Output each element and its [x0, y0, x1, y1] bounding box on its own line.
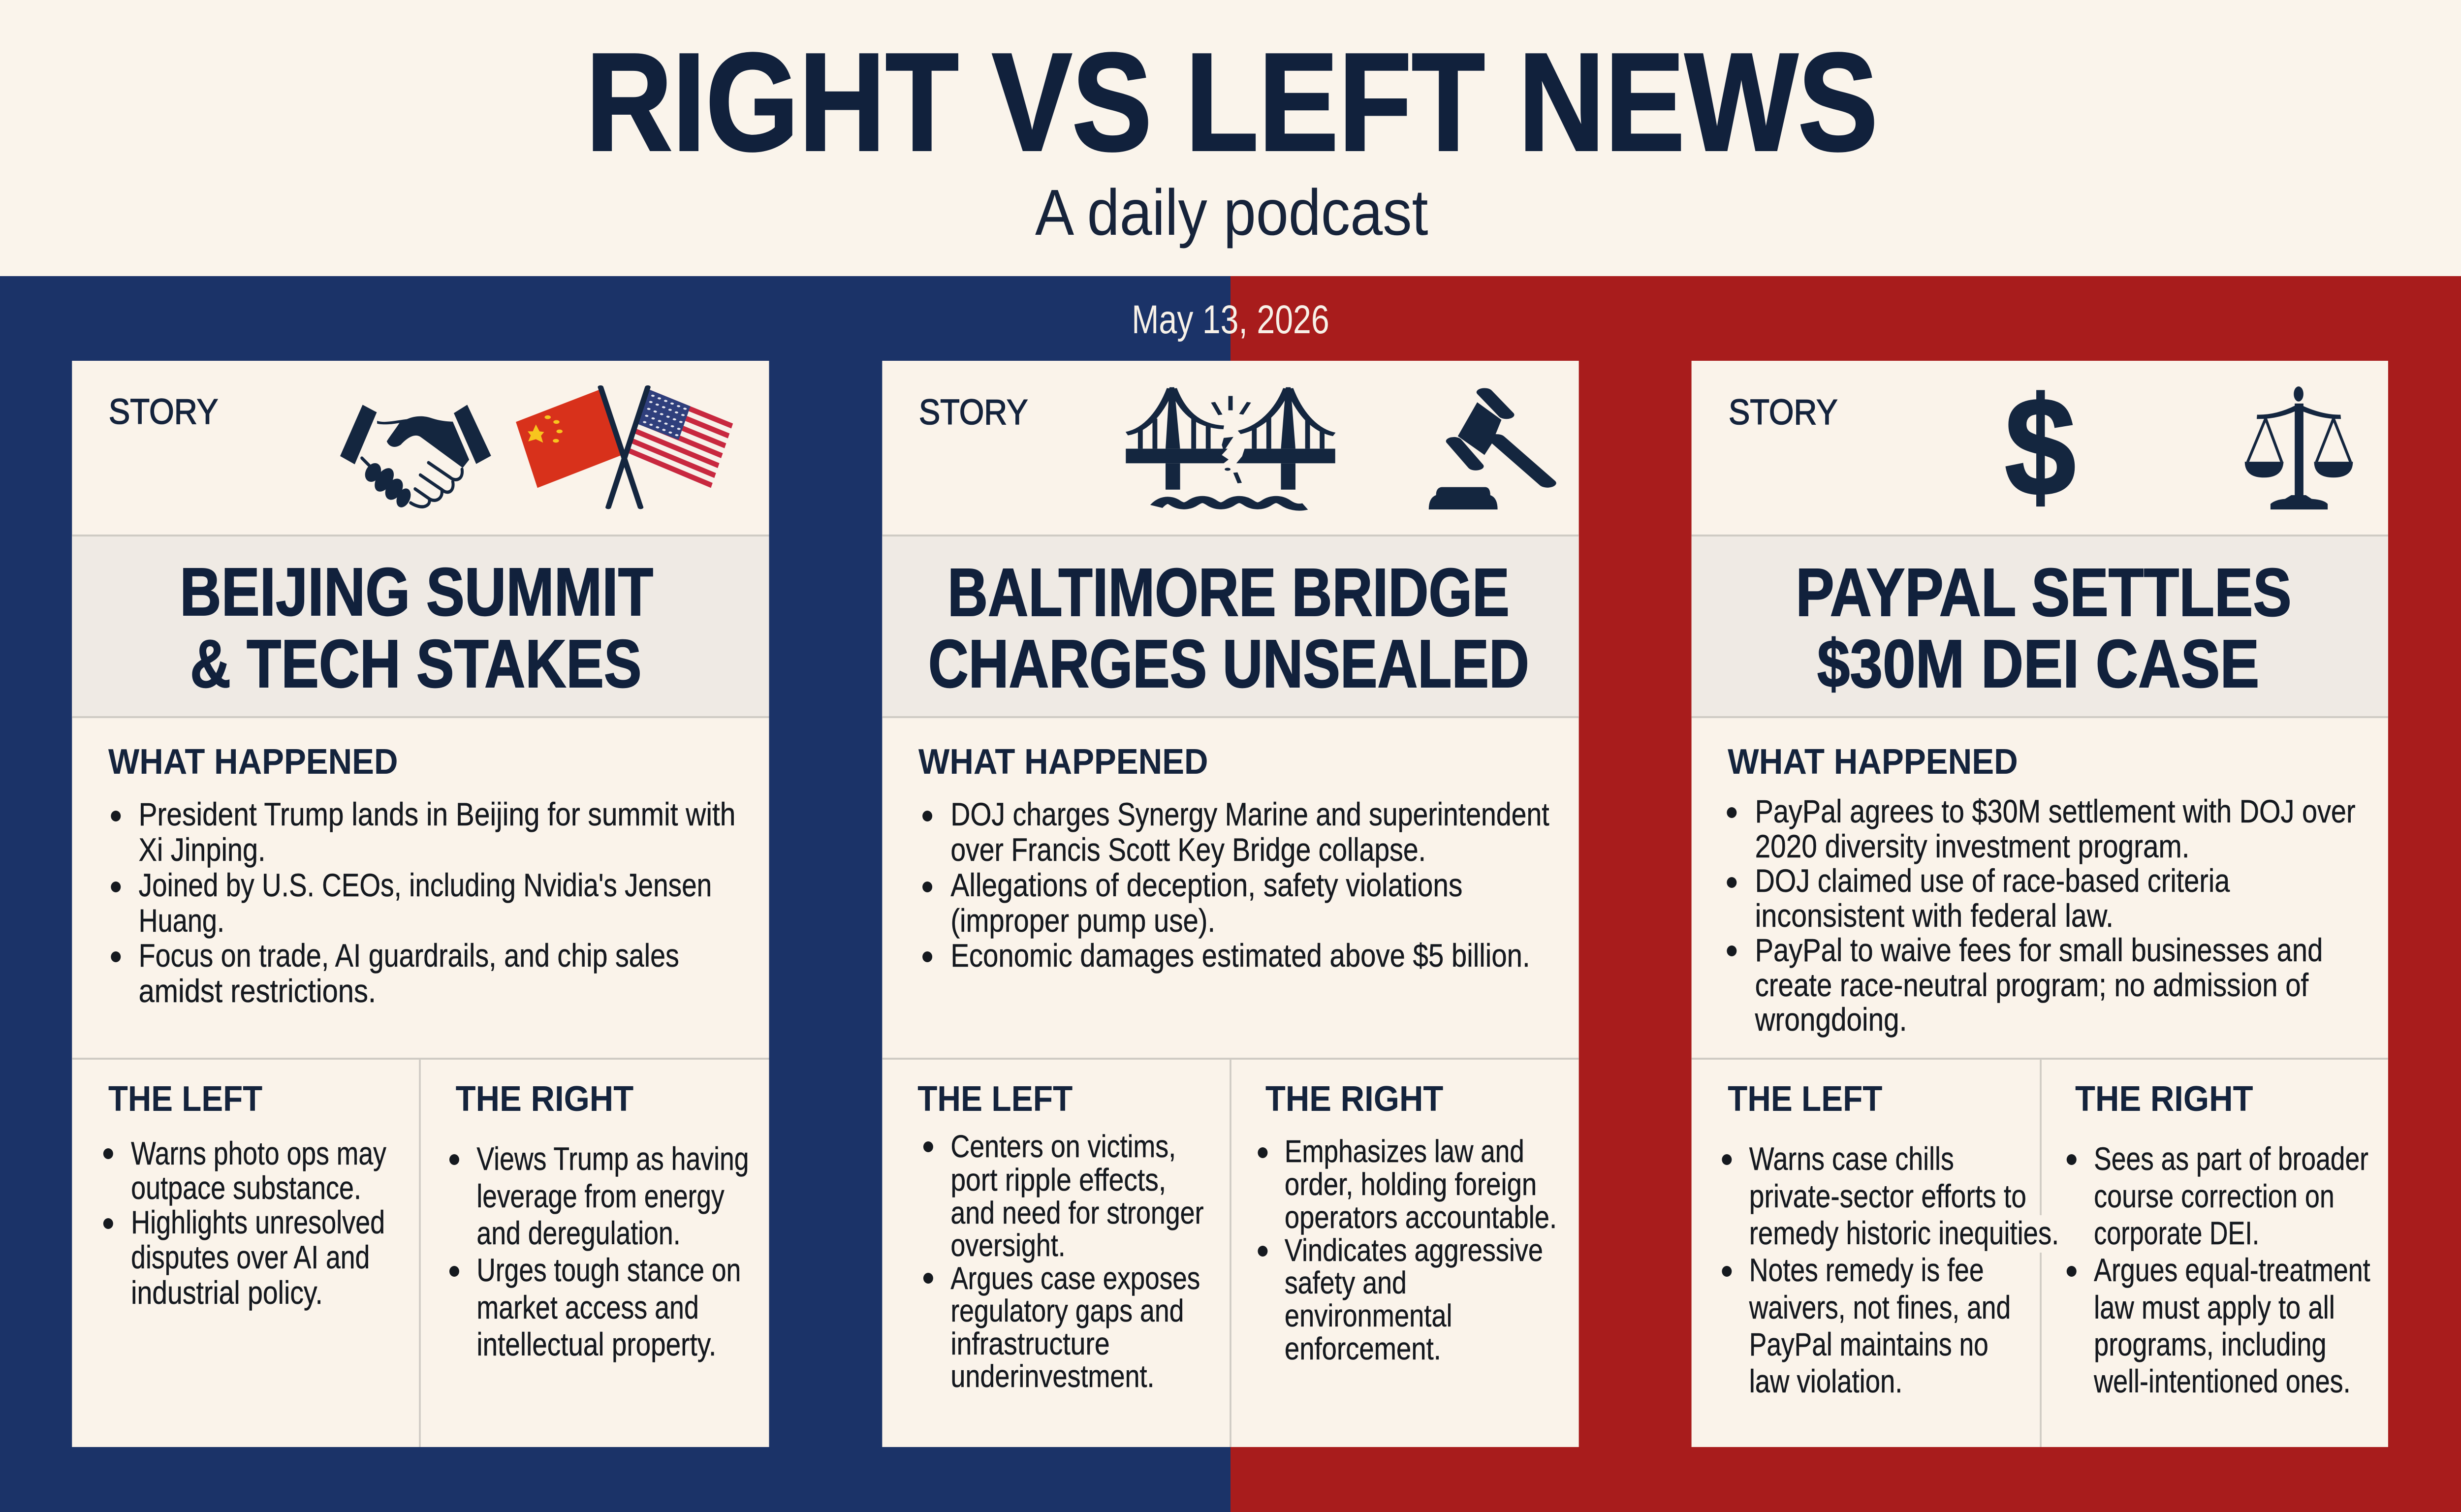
what happened bullets: Huang. — [139, 903, 224, 939]
the right bullets: corporate DEI. — [2094, 1215, 2259, 1252]
the right bullets: Urges tough stance on — [476, 1252, 741, 1289]
what happened bullets: wrongdoing. — [1755, 1002, 1907, 1038]
heading: the left: THE LEFT — [1728, 1079, 1882, 1119]
heading: the left: THE LEFT — [917, 1079, 1073, 1119]
the right bullets: course correction on — [2094, 1178, 2335, 1215]
the left bullets: PayPal maintains no — [1749, 1326, 1988, 1363]
what happened bullets: PayPal agrees to $30M settlement with DOJ over — [1755, 793, 2356, 830]
icon: crossed China and US flags — [516, 387, 733, 507]
the right bullets: and deregulation. — [476, 1215, 681, 1252]
headline: PAYPAL SETTLES — [1796, 554, 2292, 630]
story label: STORY — [109, 392, 218, 432]
the left bullets: infrastructure — [950, 1326, 1110, 1361]
icon: dollar sign: $ — [2005, 368, 2076, 525]
the right bullets — [2067, 1141, 2370, 1400]
the right bullets: operators accountable. — [1285, 1199, 1557, 1235]
the left bullets — [1722, 1141, 2059, 1400]
icon: gavel — [1429, 392, 1547, 509]
the right bullets: Argues equal-treatment — [2094, 1252, 2370, 1289]
the left bullets — [923, 1129, 1203, 1394]
what happened bullets — [111, 796, 735, 1009]
the left bullets: Warns case chills — [1749, 1141, 1954, 1177]
heading: what happened: WHAT HAPPENED — [918, 742, 1208, 782]
red background half — [1230, 276, 2461, 1512]
the right bullets: enforcement. — [1285, 1331, 1441, 1366]
heading: the right: THE RIGHT — [1265, 1079, 1443, 1119]
the right bullets: well-intentioned ones. — [2093, 1363, 2351, 1400]
heading: what happened: WHAT HAPPENED — [108, 742, 398, 782]
panel: Baltimore bridge story — [882, 361, 1579, 1447]
the left bullets: private-sector efforts to — [1749, 1178, 2026, 1215]
the left bullets: remedy historic inequities. — [1749, 1215, 2059, 1252]
headline: $30M DEI CASE — [1817, 626, 2259, 701]
the left bullets: regulatory gaps and — [950, 1293, 1184, 1328]
story label: STORY — [1729, 392, 1838, 432]
icon: broken bridge — [1126, 387, 1335, 507]
what happened bullets: Allegations of deception, safety violations — [950, 867, 1462, 904]
what happened bullets: DOJ charges Synergy Marine and superintendent — [950, 796, 1549, 833]
the right bullets: order, holding foreign — [1285, 1166, 1537, 1202]
what happened bullets: create race-neutral program; no admission of — [1755, 967, 2309, 1004]
what happened bullets: Joined by U.S. CEOs, including Nvidia's Jensen — [139, 867, 712, 904]
the right bullets: leverage from energy — [476, 1178, 725, 1215]
story label: STORY — [919, 392, 1028, 432]
the right bullets: Views Trump as having — [476, 1141, 749, 1177]
headline — [180, 554, 653, 701]
what happened bullets — [922, 796, 1549, 974]
what happened bullets: DOJ claimed use of race-based criteria — [1755, 863, 2230, 899]
blue background half — [0, 276, 1230, 1512]
what happened bullets: amidst restrictions. — [139, 973, 376, 1009]
what happened bullets: Focus on trade, AI guardrails, and chip sales — [139, 938, 679, 974]
header background — [0, 0, 2461, 276]
heading: the right: THE RIGHT — [2075, 1079, 2253, 1119]
what happened bullets: PayPal to waive fees for small businesses and — [1755, 932, 2323, 969]
the right bullets: environmental — [1285, 1298, 1452, 1333]
what happened bullets: over Francis Scott Key Bridge collapse. — [950, 832, 1426, 868]
the right bullets: market access and — [476, 1290, 699, 1326]
the left bullets: and need for stronger — [950, 1195, 1203, 1230]
the right bullets — [449, 1141, 749, 1363]
heading: the left: THE LEFT — [108, 1079, 262, 1119]
the right bullets: intellectual property. — [476, 1326, 716, 1363]
what happened bullets: Xi Jinping. — [139, 832, 266, 868]
headline: & TECH STAKES — [190, 626, 642, 701]
the left bullets: Notes remedy is fee — [1749, 1252, 1984, 1289]
headline — [928, 554, 1529, 701]
what happened bullets — [1727, 793, 2356, 1038]
heading: the right: THE RIGHT — [456, 1079, 633, 1119]
icon: scales of justice — [2245, 386, 2353, 509]
icon: handshake — [340, 405, 491, 510]
title: RIGHT VS LEFT NEWS — [586, 25, 1878, 180]
what happened bullets: inconsistent with federal law. — [1755, 898, 2114, 934]
the right bullets: law must apply to all — [2094, 1290, 2335, 1326]
the left bullets: disputes over AI and — [131, 1239, 370, 1276]
panel: PayPal settlement story — [1692, 361, 2388, 1447]
the left bullets: port ripple effects, — [950, 1162, 1166, 1197]
panel: Beijing summit story — [72, 361, 769, 1447]
headline — [1796, 554, 2292, 701]
what happened bullets: (improper pump use). — [950, 903, 1215, 939]
the left bullets: oversight. — [950, 1228, 1066, 1263]
the left bullets: Warns photo ops may — [131, 1135, 386, 1172]
the left bullets: Highlights unresolved — [131, 1204, 385, 1241]
the left bullets: Centers on victims, — [950, 1129, 1176, 1164]
date: May 13, 2026 — [1132, 297, 1329, 342]
the left bullets: Argues case exposes — [950, 1260, 1200, 1296]
the right bullets: programs, including — [2094, 1326, 2327, 1363]
the left bullets — [103, 1135, 386, 1311]
the left bullets: industrial policy. — [131, 1275, 323, 1311]
the right bullets: Sees as part of broader — [2094, 1141, 2368, 1177]
the left bullets: waivers, not fines, and — [1749, 1290, 2011, 1326]
the right bullets — [1258, 1134, 1557, 1366]
headline: BALTIMORE BRIDGE — [947, 554, 1510, 630]
what happened bullets: 2020 diversity investment program. — [1755, 828, 2190, 865]
subtitle: A daily podcast — [1035, 176, 1428, 249]
heading: what happened: WHAT HAPPENED — [1728, 742, 2018, 782]
the left bullets: outpace substance. — [131, 1170, 361, 1206]
the right bullets: Vindicates aggressive — [1285, 1232, 1543, 1268]
what happened bullets: Economic damages estimated above $5 billion. — [950, 938, 1530, 974]
the left bullets: law violation. — [1749, 1363, 1902, 1400]
headline: BEIJING SUMMIT — [180, 554, 653, 630]
what happened bullets: President Trump lands in Beijing for summit with — [139, 796, 735, 833]
headline: CHARGES UNSEALED — [928, 626, 1529, 701]
the left bullets: underinvestment. — [950, 1358, 1155, 1394]
the right bullets: safety and — [1285, 1265, 1407, 1300]
the right bullets: Emphasizes law and — [1285, 1134, 1524, 1169]
